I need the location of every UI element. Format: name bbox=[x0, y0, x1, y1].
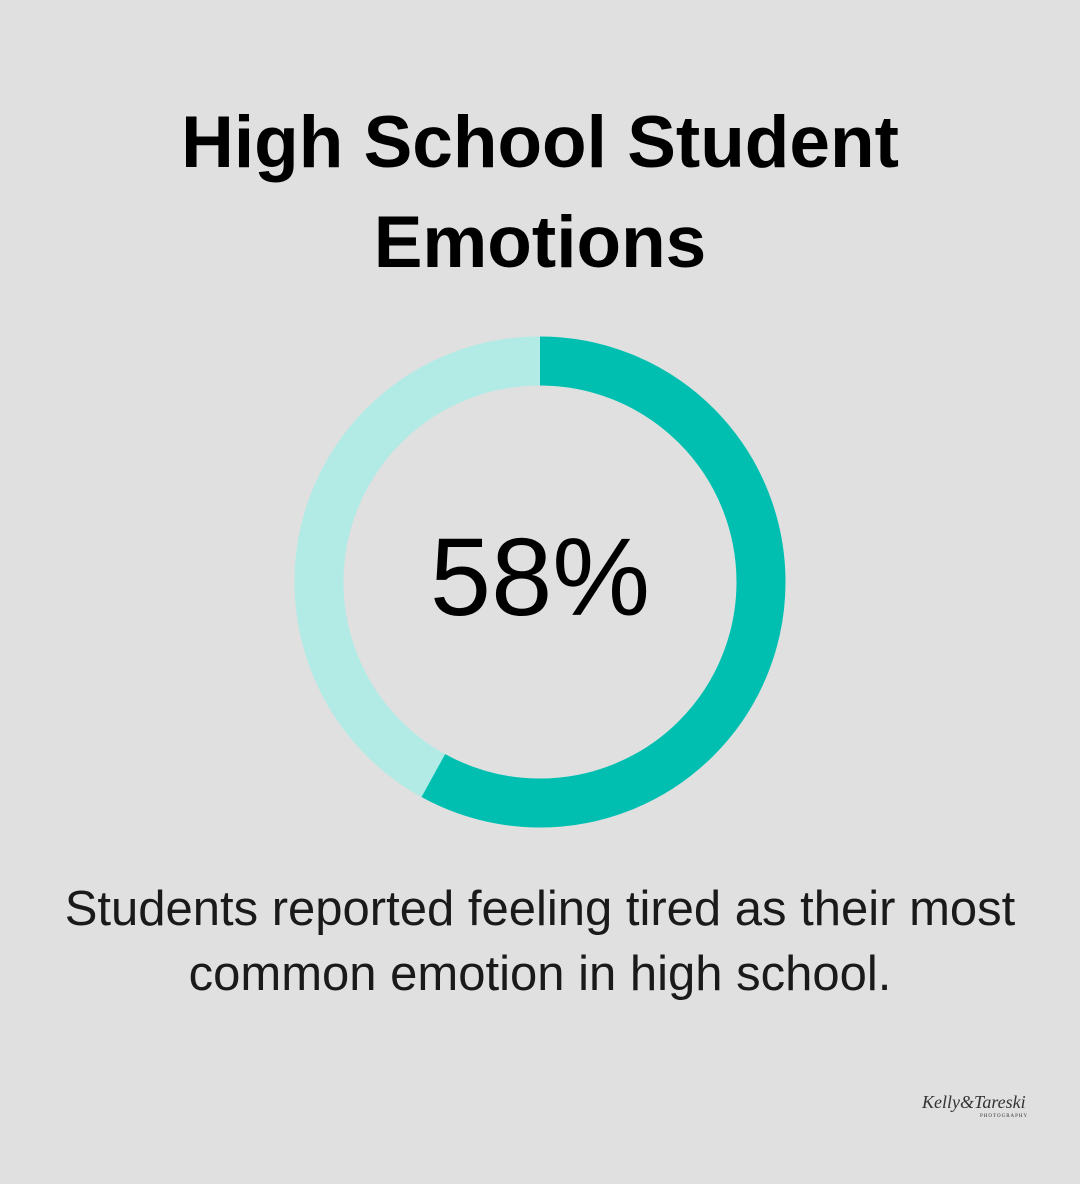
title: Emotions bbox=[374, 202, 706, 283]
description: common emotion in high school. bbox=[189, 947, 891, 1001]
description bbox=[65, 882, 1015, 1001]
signature: Kelly&Tareski bbox=[922, 1092, 1026, 1112]
signature: PHOTOGRAPHY bbox=[980, 1114, 1028, 1119]
title bbox=[181, 102, 899, 283]
description: Students reported feeling tired as their most bbox=[65, 882, 1015, 936]
percentage: 58% bbox=[430, 516, 650, 639]
title: High School Student bbox=[181, 102, 899, 183]
